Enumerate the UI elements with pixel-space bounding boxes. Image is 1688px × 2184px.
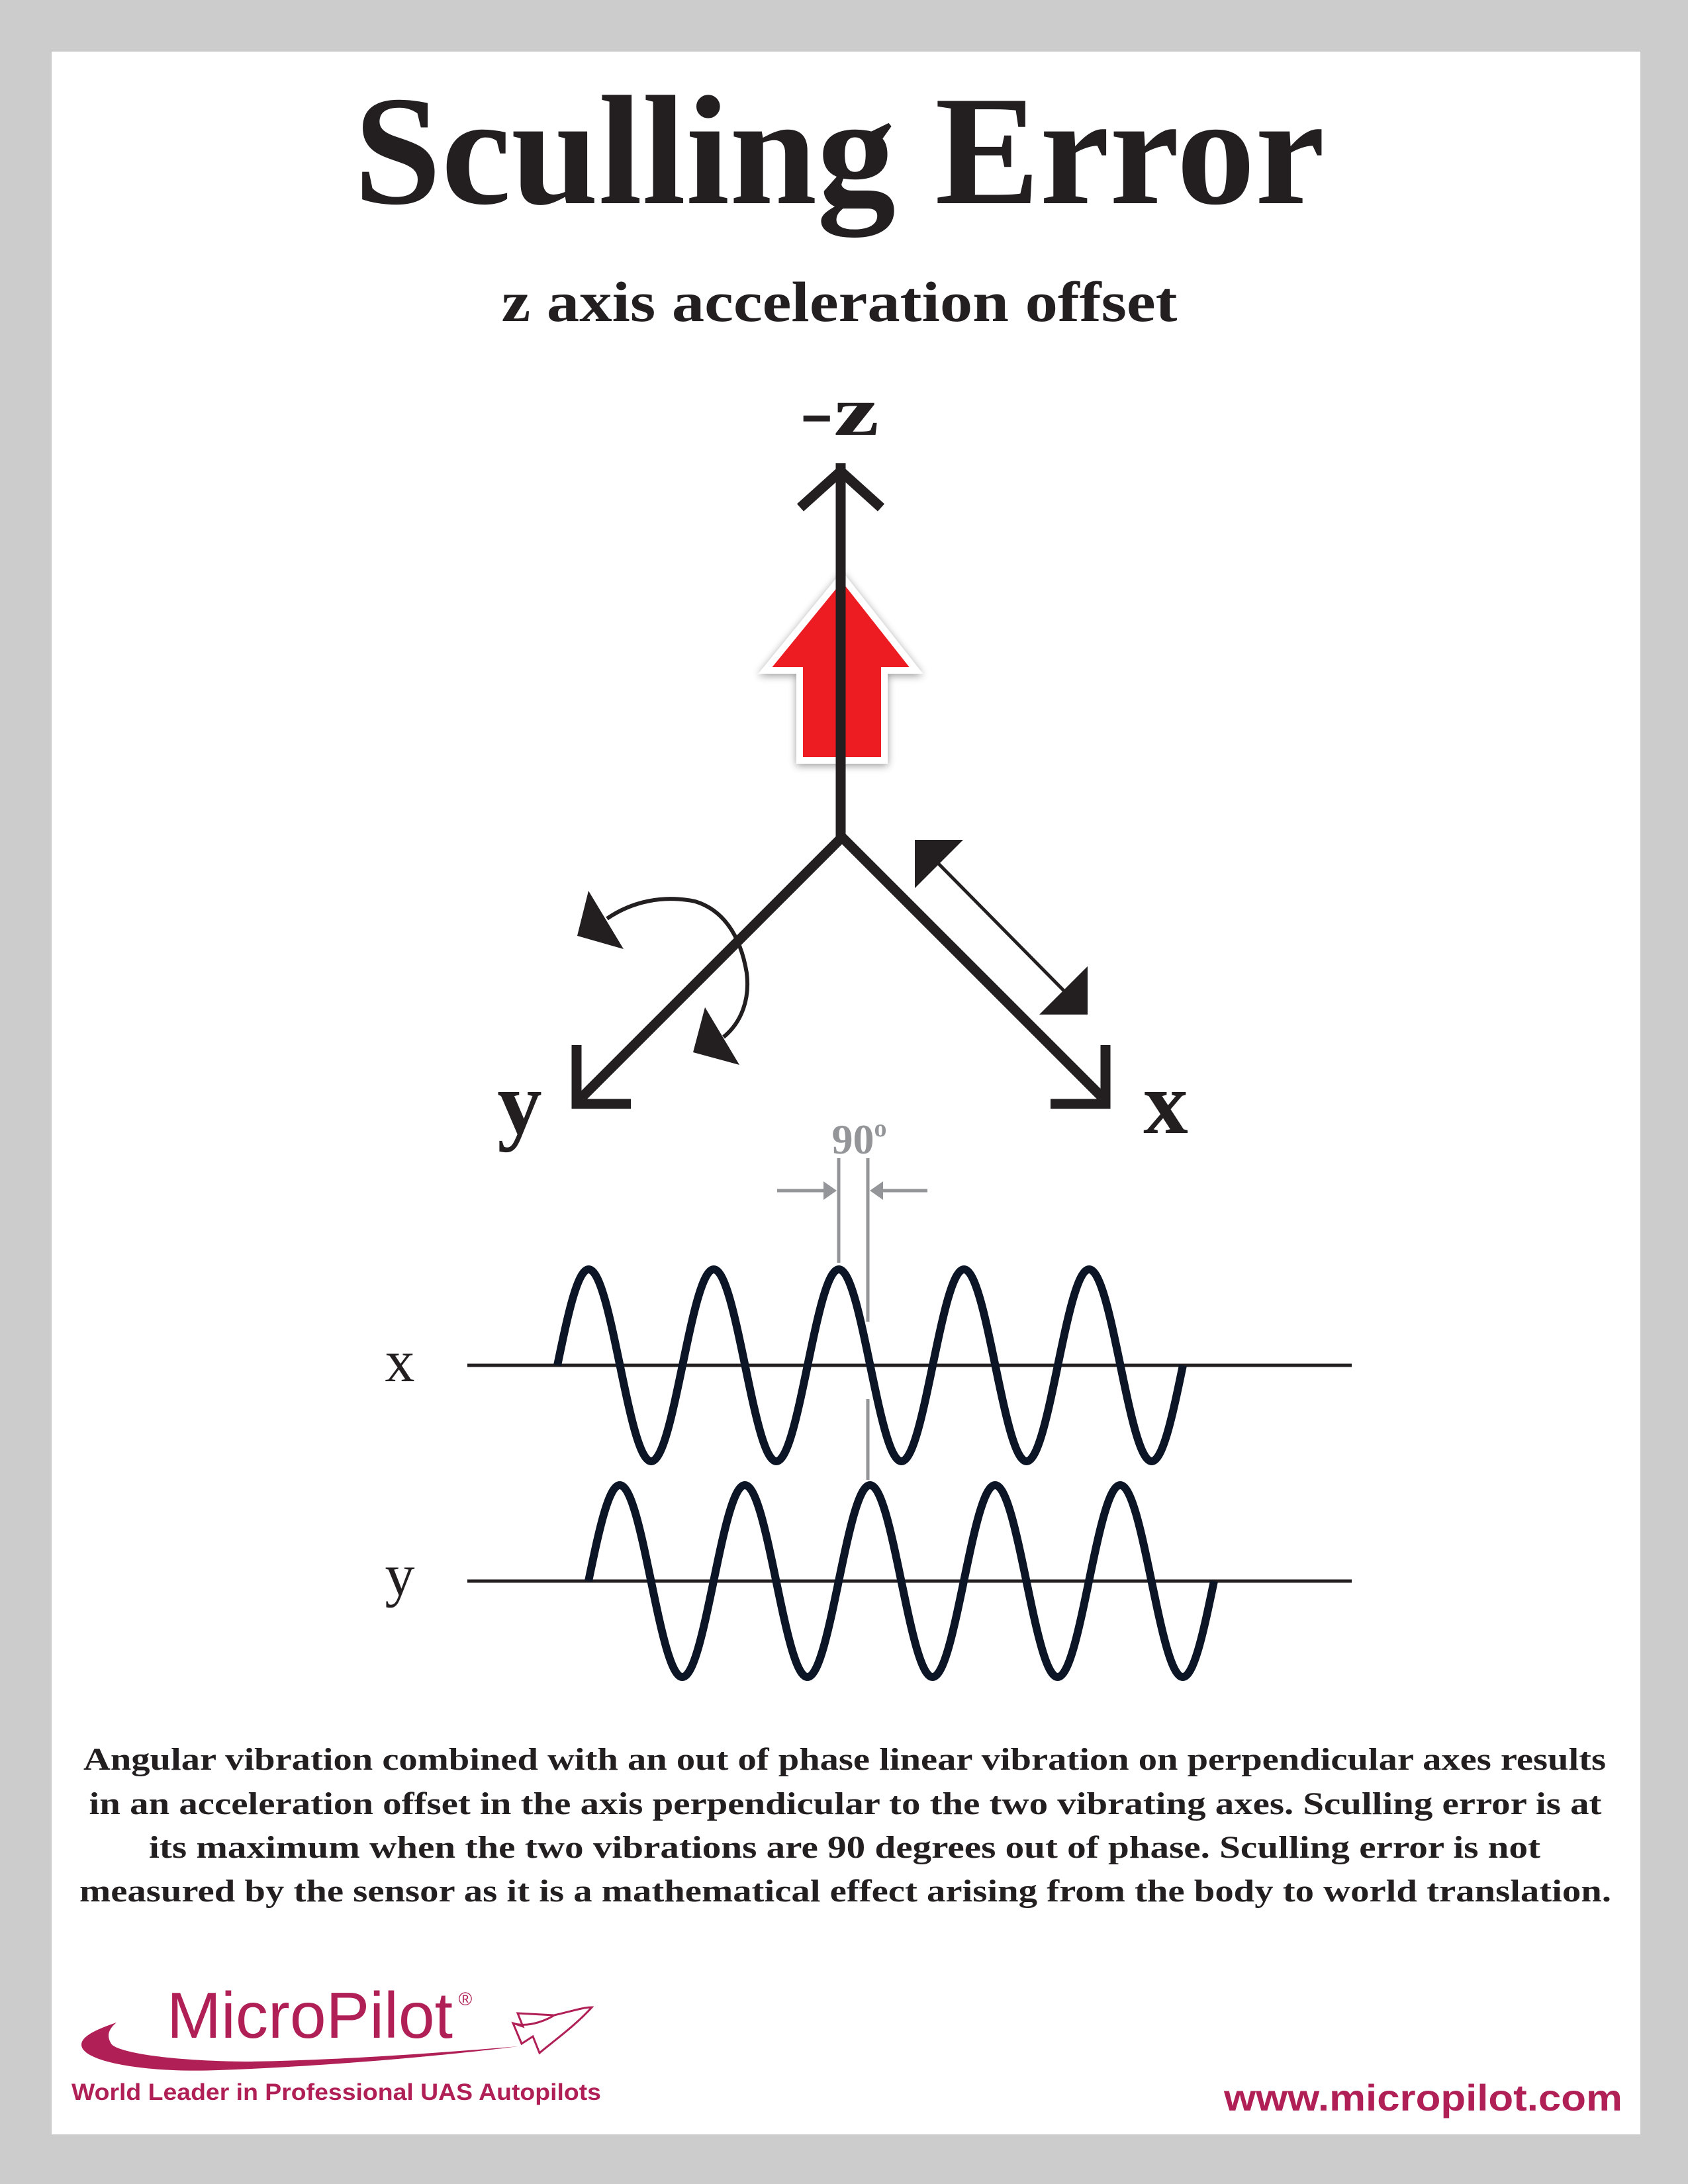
logo: MicroPilot: MicroPilot <box>167 1979 453 2052</box>
90 degree phase marker: o <box>874 1115 887 1142</box>
icon: plane outline <box>513 2007 592 2053</box>
z axis <box>800 463 881 837</box>
red arrow: acceleration offset <box>765 576 916 760</box>
chart: x vibration wave: x <box>385 1329 414 1394</box>
text block: explanation: its maximum when the two vibrations are 90 degrees out of phase. Sculling error is not <box>149 1830 1540 1865</box>
90 degree phase marker: 90 <box>831 1116 874 1163</box>
tagline: World Leader in Professional UAS Autopilots <box>71 2079 601 2105</box>
icon: linear vibration double arrow <box>915 840 1088 1015</box>
chart: y vibration wave <box>385 1485 1352 1677</box>
90 degree phase marker <box>777 1115 927 1480</box>
text block: explanation <box>79 1742 1611 1909</box>
label: -z: -z <box>800 373 879 450</box>
axis diagram <box>497 373 1188 1153</box>
text block: explanation: measured by the sensor as it is a mathematical effect arising from the body to world translation. <box>79 1874 1611 1909</box>
label: y: y <box>497 1054 542 1153</box>
title: Sculling Error <box>353 65 1325 238</box>
logo: MicroPilot <box>71 1979 601 2105</box>
text block: explanation: Angular vibration combined with an out of phase linear vibration on perpendicular axes results <box>83 1742 1606 1777</box>
y axis <box>577 837 842 1104</box>
chart: x vibration wave <box>385 1269 1352 1461</box>
subtitle: z axis acceleration offset <box>502 270 1178 334</box>
logo: MicroPilot: ® <box>459 1989 473 2009</box>
chart: y vibration wave: y <box>385 1543 414 1608</box>
icon: angular vibration curved arrow <box>577 891 747 1065</box>
url: www.micropilot.com <box>1223 2077 1622 2118</box>
x axis <box>842 837 1105 1104</box>
text block: explanation: in an acceleration offset in the axis perpendicular to the two vibrating axes. Sculling error is at <box>89 1786 1602 1821</box>
label: x: x <box>1143 1054 1188 1153</box>
